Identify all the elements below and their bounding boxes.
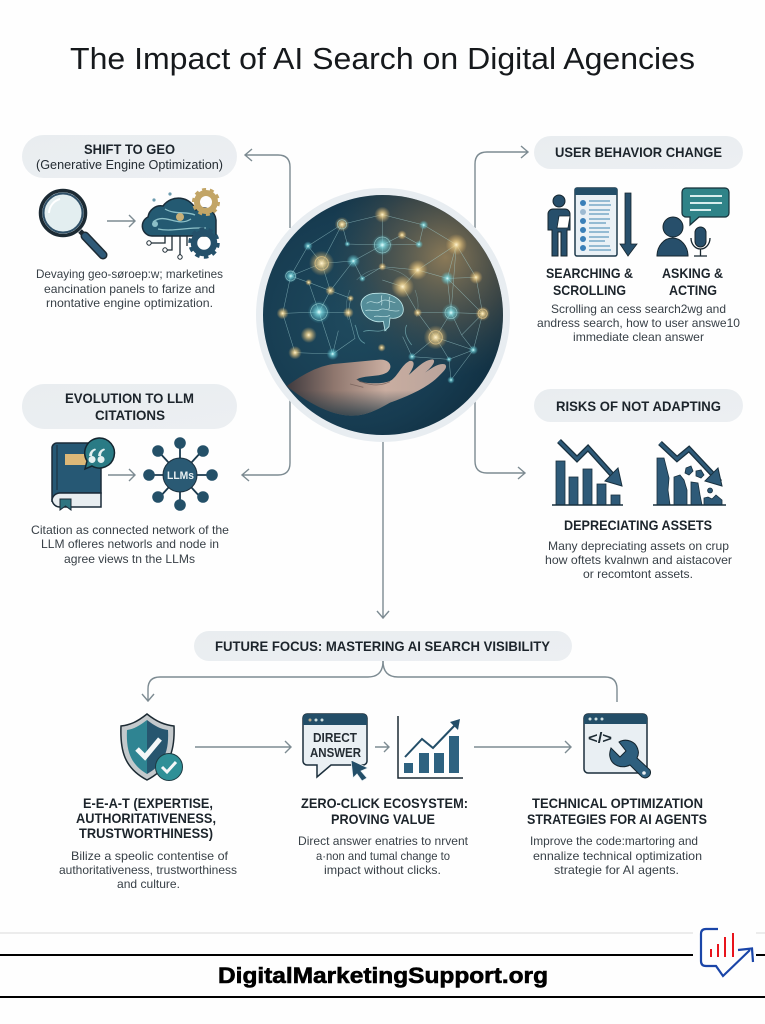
body text: agree views tn the LLMs: [64, 552, 195, 566]
body text: rnontative engine optimization.: [46, 296, 213, 310]
heading pill: shift to GEO: (Generative Engine Optimization): [36, 157, 223, 172]
subheadings: SCROLLING: [553, 282, 626, 298]
body text: authoritativeness, trustworthiness: [59, 863, 237, 877]
heading: [76, 795, 216, 841]
body text: immediate clean answer: [573, 330, 704, 344]
subheadings: ACTING: [669, 282, 717, 298]
heading pill: user behavior: [534, 136, 743, 169]
body text: a·non and tumal change to: [316, 849, 450, 863]
heading pill: LLM citations: CITATIONS: [95, 407, 165, 423]
icon: falling bar chart: [552, 441, 623, 505]
body text: eancination panels to farize and: [44, 282, 215, 296]
heading: TRUSTWORTHINESS): [79, 825, 213, 841]
body text: [36, 267, 223, 310]
body text: Citation as connected network of the: [31, 523, 229, 537]
icon: code window with wrench: [584, 714, 650, 778]
subheadings: SEARCHING &: [546, 265, 633, 281]
heading pill: risks: RISKS OF NOT ADAPTING: [556, 398, 721, 414]
icon: person asking with microphone: [657, 188, 729, 256]
arrow: [195, 741, 291, 753]
central image: hand holding AI brain network: [256, 188, 510, 442]
icon: footer logo: [701, 929, 753, 976]
arrow: [474, 741, 571, 753]
body text: Scrolling an cess search2wg and: [551, 302, 726, 316]
subheading: DEPRECIATING ASSETS: [564, 517, 712, 533]
body text: [530, 834, 702, 877]
heading: STRATEGIES FOR AI AGENTS: [527, 811, 707, 827]
body text: [31, 523, 229, 566]
arrow: [108, 469, 135, 481]
body text: [537, 302, 740, 344]
subheadings: ASKING &: [662, 265, 723, 281]
body text: [545, 539, 732, 581]
icon: code window with wrench: </>: [588, 730, 612, 747]
icon: person searching and scrolling: [548, 188, 637, 256]
panel: risks of not adapting: [534, 389, 743, 581]
icon: direct answer bubble: ANSWER: [310, 745, 362, 760]
title: The Impact of AI Search on Digital Agencies: [70, 41, 695, 76]
body text: Bilize a speolic contentise of: [71, 849, 229, 863]
body text: strategie for AI agents.: [554, 863, 679, 877]
body text: Many depreciating assets on crup: [548, 539, 729, 553]
footer site name: DigitalMarketingSupport.org: [218, 963, 548, 988]
heading: PROVING VALUE: [331, 811, 435, 827]
body text: ennalize technical optimization: [533, 849, 702, 863]
panel: technical optimization: [527, 714, 707, 877]
body text: [298, 834, 469, 877]
heading pill: LLM citations: [22, 384, 237, 429]
heading: E-E-A-T (EXPERTISE,: [83, 795, 213, 811]
heading pill: LLM citations: EVOLUTION TO LLM: [65, 390, 194, 406]
heading pill: user behavior: USER BEHAVIOR CHANGE: [555, 144, 722, 160]
subheadings: [546, 265, 723, 298]
body text: andress search, how to user answe10: [537, 316, 740, 330]
connector arrows around the central image: [142, 146, 617, 702]
arrow: [375, 742, 389, 752]
body text: impact without clicks.: [324, 863, 441, 877]
icon: direct answer bubble: [303, 714, 368, 781]
footer: [0, 925, 765, 997]
icon: LLM network: [143, 437, 218, 511]
panel: shift to GEO: [22, 135, 237, 310]
heading: AUTHORITATIVENESS,: [76, 810, 216, 826]
icon: shield with checkmarks: [121, 714, 182, 780]
panel: user behavior change: [534, 136, 743, 344]
heading pill: future focus: FUTURE FOCUS: MASTERING AI SEARCH VISIBILITY: [215, 638, 551, 654]
heading pill: shift to GEO: SHIFT TO GEO: [84, 141, 175, 157]
body text: or recomtont assets.: [583, 567, 693, 581]
panel: E-E-A-T: [59, 714, 237, 891]
heading: ZERO-CLICK ECOSYSTEM:: [301, 795, 468, 811]
panel: evolution to LLM citations: [22, 384, 237, 566]
icon: magnifying glass: [40, 190, 103, 255]
heading pill: risks: [534, 389, 743, 422]
body text: [59, 849, 237, 891]
body text: and culture.: [117, 877, 180, 891]
body text: Direct answer enatries to nrvent: [298, 834, 469, 848]
icon: LLM network: LLMs: [167, 470, 194, 482]
icon: growth chart: [398, 716, 463, 778]
heading pill: future focus: [194, 631, 572, 661]
body text: Improve the code:martoring and: [530, 834, 698, 848]
icon: crumbling bar chart: [653, 443, 726, 505]
icon: AI cloud with gears: [142, 190, 218, 259]
heading: [301, 795, 468, 827]
heading pill: shift to GEO: [22, 135, 237, 178]
icon: direct answer bubble: DIRECT: [313, 730, 357, 745]
arrow: [107, 215, 135, 227]
heading: TECHNICAL OPTIMIZATION: [532, 795, 703, 811]
body text: Devaying geo-søroep:w; marketines: [36, 267, 223, 281]
body text: how oftets kvalnwn and aistacover: [545, 553, 732, 567]
panel: zero-click ecosystem: [298, 714, 469, 877]
body text: LLM ofleres networls and node in: [41, 537, 219, 551]
icon: book with quote bubble: [52, 438, 114, 510]
heading: [527, 795, 707, 827]
